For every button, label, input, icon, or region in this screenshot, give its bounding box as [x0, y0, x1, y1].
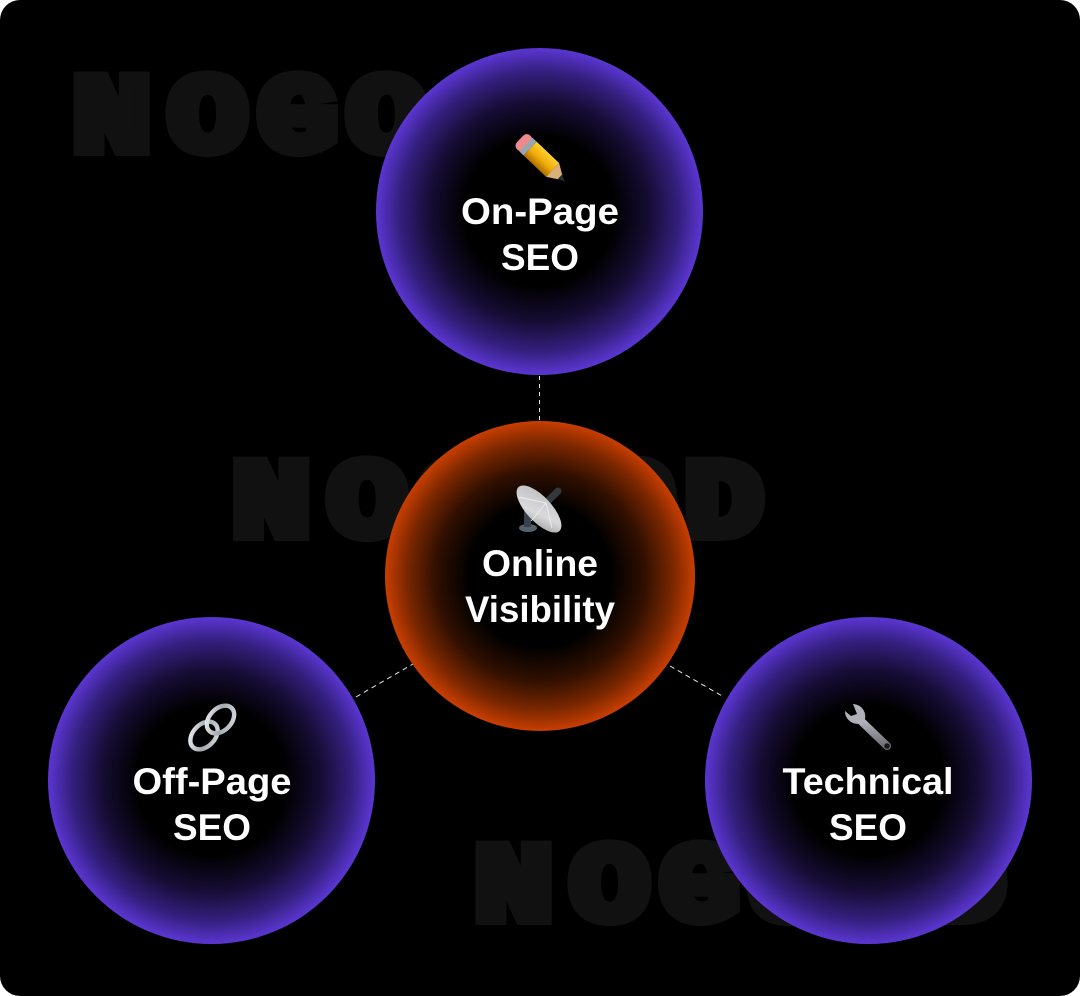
label: Off-Page SEO: [132, 761, 292, 848]
panel: Off-Page SEO circle: [48, 617, 375, 944]
watermark: bottom-right logo: NOGOOD: [474, 828, 1006, 952]
label: Technical SEO: Technical: [782, 761, 954, 802]
watermark: centre logo: NOGOOD: [232, 444, 763, 568]
label: Off-Page SEO: SEO: [173, 807, 251, 848]
icon: wrench: [845, 704, 890, 749]
label: On-Page SEO: [461, 191, 619, 278]
connector: on-page to centre: [538, 376, 540, 421]
connector: technical to centre: [670, 666, 724, 697]
panel: Technical SEO circle: [705, 617, 1032, 944]
icon: satellite dish: [509, 479, 569, 539]
label: Technical SEO: [782, 761, 954, 848]
connector: off-page to centre: [356, 664, 413, 697]
label: Online Visibility: Visibility: [465, 589, 615, 630]
label: Technical SEO: SEO: [829, 807, 907, 848]
panel: On-Page SEO circle: [376, 48, 703, 375]
label: Off-Page SEO: Off-Page: [132, 761, 292, 802]
label: Online Visibility: Online: [482, 543, 598, 584]
icon: pencil: [513, 132, 572, 189]
label: On-Page SEO: On-Page: [461, 191, 619, 232]
label: On-Page SEO: SEO: [501, 237, 579, 278]
icon: chain link: [185, 700, 240, 755]
panel: Online Visibility circle: [385, 421, 695, 731]
label: Online Visibility: [465, 543, 615, 630]
watermark: top-left logo: NOGOOD: [72, 59, 604, 183]
